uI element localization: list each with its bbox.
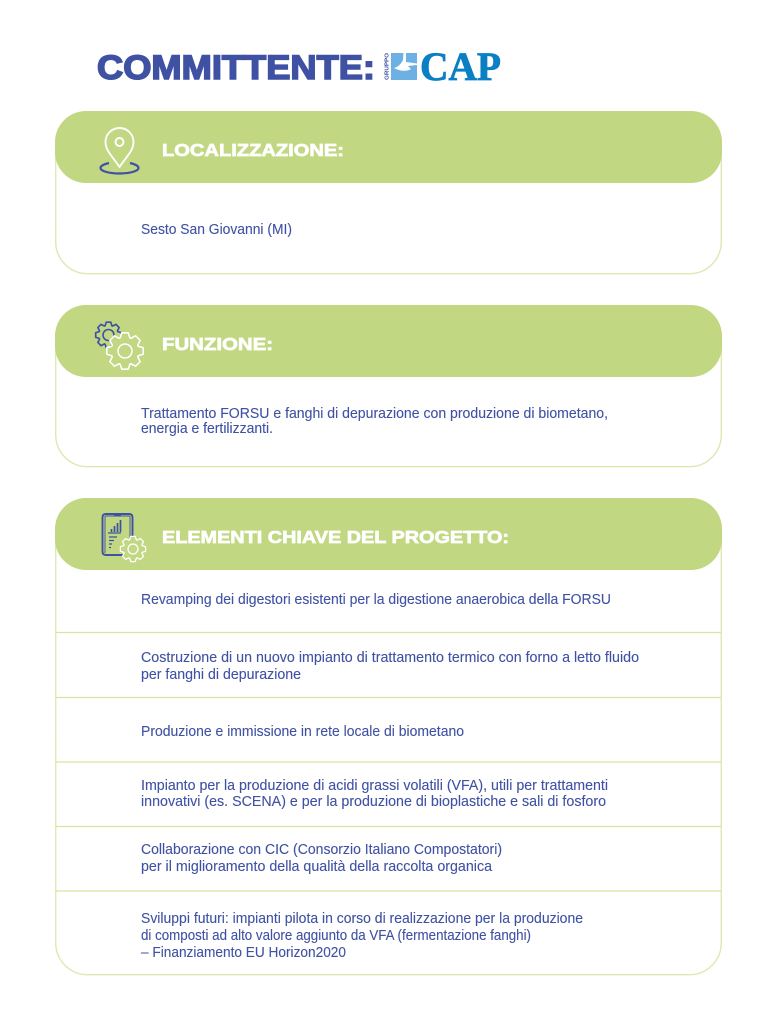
panel: elementi chiave xyxy=(55,498,722,975)
text: location: Sesto San Giovanni (MI) xyxy=(141,222,292,238)
text: sviluppi futuri: di composti ad alto valore aggiunto da VFA (fermentazione fanghi) xyxy=(141,928,531,944)
icon: tablet with gear xyxy=(102,514,146,562)
text: impianto xyxy=(141,778,608,810)
text: costruzione xyxy=(141,650,639,683)
panel: localizzazione xyxy=(55,111,722,274)
text: sviluppi futuri: – Finanziamento EU Horizon2020 xyxy=(141,945,346,961)
text: function: Trattamento FORSU e fanghi di depurazione con produzione di biometano, xyxy=(141,406,608,422)
text: collaborazione: Collaborazione con CIC (Consorzio Italiano Compostatori) xyxy=(141,842,502,858)
text: sviluppi futuri: Sviluppi futuri: impianti pilota in corso di realizzazione per la produzione xyxy=(141,911,583,927)
icon: gears xyxy=(96,322,143,369)
header: elementi chiave xyxy=(55,498,722,570)
title: COMMITTENTE: xyxy=(97,49,375,87)
logo: Gruppo CAP: GRUPPO xyxy=(384,52,390,80)
panel: funzione xyxy=(55,305,722,467)
text: costruzione: Costruzione di un nuovo impianto di trattamento termico con forno a letto fluido xyxy=(141,650,639,666)
text: function xyxy=(141,406,608,437)
text: produzione: Produzione e immissione in rete locale di biometano xyxy=(141,724,464,740)
text: function: energia e fertilizzanti. xyxy=(141,421,273,437)
text: impianto: innovativi (es. SCENA) e per la produzione di bioplastiche e sali di fosforo xyxy=(141,794,606,810)
heading: funzione: FUNZIONE: xyxy=(162,334,273,354)
text: impianto: Impianto per la produzione di acidi grassi volatili (VFA), utili per trattamenti xyxy=(141,778,608,794)
heading: localizzazione: LOCALIZZAZIONE: xyxy=(162,140,344,160)
logo: Gruppo CAP xyxy=(384,44,501,89)
text: collaborazione xyxy=(141,842,502,875)
icon: location pin xyxy=(100,128,138,174)
header: funzione xyxy=(55,305,722,377)
text: sviluppi futuri xyxy=(141,911,583,961)
text: costruzione: per fanghi di depurazione xyxy=(141,667,301,683)
header: localizzazione xyxy=(55,111,722,183)
heading: elementi chiave: ELEMENTI CHIAVE DEL PROGETTO: xyxy=(162,527,509,547)
text: collaborazione: per il miglioramento della qualità della raccolta organica xyxy=(141,859,493,875)
text: revamping: Revamping dei digestori esistenti per la digestione anaerobica della FORSU xyxy=(141,592,611,608)
logo: Gruppo CAP: CAP xyxy=(420,44,501,89)
